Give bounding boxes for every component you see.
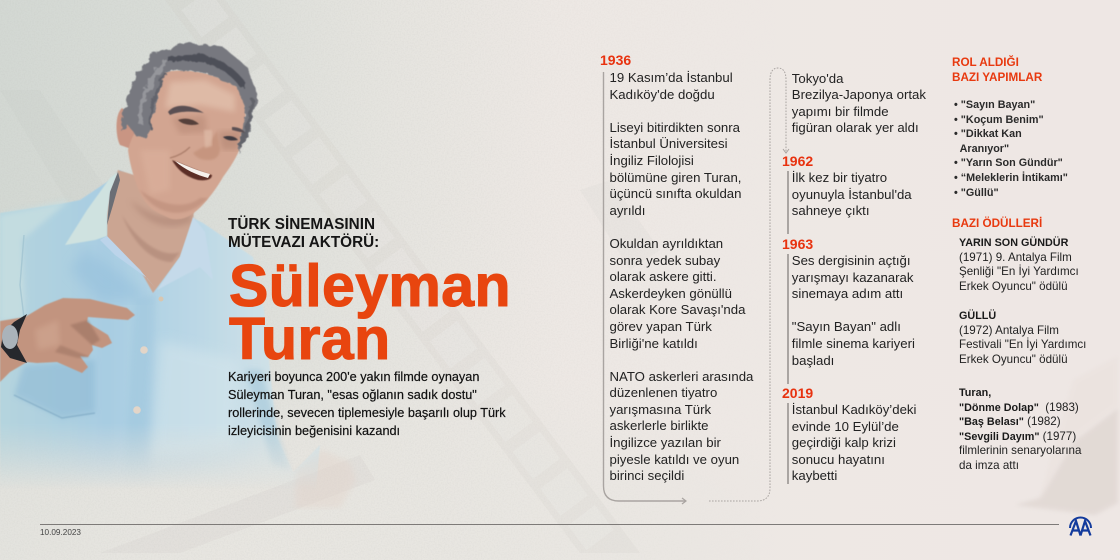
heading: subtitle xyxy=(228,215,379,251)
timeline text 1936: Birliği'ne katıldı xyxy=(610,336,698,350)
screenwriting note: "Dönme Dolap" (1983) xyxy=(959,401,1079,414)
timeline text 1963: yarışmayı kazanarak xyxy=(792,270,913,285)
screenwriting note: filmlerinin senaryolarına xyxy=(959,444,1081,457)
timeline text 1936: Okuldan ayrıldıktan xyxy=(610,236,723,251)
timeline text 1936: görev yapan Türk xyxy=(610,319,712,334)
eyes, brows and nose xyxy=(168,106,204,115)
timeline text 2019: kaybetti xyxy=(792,468,837,483)
continued text 1936: figüran olarak yer aldı xyxy=(792,120,919,135)
shirt folds and placket xyxy=(134,300,152,434)
screenwriting note xyxy=(959,387,1082,472)
timeline text 1936: 19 Kasım’da İstanbul xyxy=(610,70,733,85)
timeline text 1962: sahneye çıktı xyxy=(792,203,870,218)
intro text xyxy=(228,370,506,438)
timeline text 1963: başladı xyxy=(792,353,834,368)
list of films xyxy=(954,99,1068,199)
heading: subtitle: MÜTEVAZI AKTÖRÜ: xyxy=(228,234,379,251)
shirt buttons xyxy=(140,346,148,354)
face xyxy=(128,71,246,219)
timeline text 2019 xyxy=(792,402,916,483)
timeline text 1962: oyunuyla İstanbul'da xyxy=(792,187,912,202)
timeline text 1936: düzenlenen tiyatro xyxy=(610,385,717,400)
forehead highlight xyxy=(165,80,235,112)
list of films: • "Dikkat Kan xyxy=(954,128,1022,140)
award: Yarın Son Gündür: YARIN SON GÜNDÜR xyxy=(959,237,1068,249)
heading: name: Süleyman xyxy=(229,253,511,319)
timeline column 2 xyxy=(782,70,926,484)
screenwriting note: Turan, xyxy=(959,387,991,399)
timeline text 1936: İngiliz Filolojisi xyxy=(610,153,694,168)
continued text 1936: Tokyo'da xyxy=(792,70,843,86)
timeline text 2019: evinde 10 Eylül’de xyxy=(792,419,899,434)
timeline text 1936: piyesle katıldı ve oyun xyxy=(610,452,739,467)
shirt xyxy=(0,170,320,500)
timeline text 1963 xyxy=(792,253,915,368)
intro text: rollerinde, sevecen tiplemesiyle başarılı olup Türk xyxy=(228,406,506,420)
timeline text 2019: geçirdiği kalp krizi xyxy=(792,435,896,450)
heading: roles: BAZI YAPIMLAR xyxy=(952,70,1042,84)
timeline text 1936 xyxy=(610,70,754,483)
timeline text 1962 xyxy=(792,170,912,218)
timeline text 1963: Ses dergisinin açtığı xyxy=(792,253,911,268)
continued text 1936 xyxy=(792,70,926,135)
portrait photo of Süleyman Turan xyxy=(0,42,346,505)
timeline rule 1963 xyxy=(787,254,788,384)
list of films: • "Güllü" xyxy=(954,187,999,199)
ear xyxy=(116,108,136,150)
award: Yarın Son Gündür: Şenliği "En İyi Yardımcı xyxy=(959,265,1079,278)
timeline text 1936: sonra yedek subay xyxy=(610,253,720,268)
timeline text 1963: filmle sinema kariyeri xyxy=(792,336,915,351)
timeline text 2019: İstanbul Kadıköy’deki xyxy=(792,402,916,417)
timeline text 1936: olarak askere gitti. xyxy=(610,269,717,284)
smile xyxy=(172,160,212,180)
collar xyxy=(65,172,118,245)
icon: AA logo xyxy=(1069,516,1092,536)
timeline text 1936: birinci seçildi xyxy=(610,468,684,483)
timeline text 1936: ayrıldı xyxy=(610,203,645,218)
timeline text 1936: askerlerle birlikte xyxy=(610,418,708,433)
list of films: • "Yarın Son Gündür" xyxy=(954,157,1063,169)
right body highlight xyxy=(150,342,231,454)
heading: awards: BAZI ÖDÜLLERİ xyxy=(952,216,1042,230)
heading: roles: ROL ALDIĞI xyxy=(952,56,1019,68)
timeline rule 1962 xyxy=(787,171,788,234)
timeline column 1 xyxy=(600,52,754,483)
faint forearm xyxy=(295,450,356,508)
award: Güllü xyxy=(959,309,1086,366)
timeline text 1936: olarak Kore Savaşı'nda xyxy=(610,302,745,317)
year 1963: 1963 xyxy=(782,236,813,252)
heading: roles xyxy=(952,55,1042,84)
date: 10.09.2023 xyxy=(40,528,81,537)
timeline text 1936: İstanbul Üniversitesi xyxy=(610,136,728,151)
timeline text 1936: İngilizce yazılan bir xyxy=(610,435,721,450)
intro text: Kariyeri boyunca 200'e yakın filmde oynayan xyxy=(228,370,479,384)
heading: name xyxy=(229,253,511,372)
timeline text 1963: "Sayın Bayan" adlı xyxy=(792,319,901,334)
heading: name: Turan xyxy=(229,306,391,372)
timeline rule 2019 xyxy=(787,403,788,484)
timeline connector line and arrows xyxy=(602,68,790,504)
timeline text 1936: NATO askerleri arasında xyxy=(610,369,753,384)
timeline text 2019: sonucu hayatını xyxy=(792,452,885,467)
year 2019: 2019 xyxy=(782,385,813,401)
timeline text 1962: İlk kez bir tiyatro xyxy=(792,170,887,185)
screenwriting note: da imza attı xyxy=(959,459,1019,472)
award: Güllü: Erkek Oyuncu" ödülü xyxy=(959,353,1068,366)
list of films: • "Koçum Benim" xyxy=(954,114,1044,126)
intro text: izleyicisinin beğenisini kazandı xyxy=(228,424,400,438)
award: Yarın Son Gündür xyxy=(959,236,1079,293)
timeline text 1936: yarışmasına Türk xyxy=(610,402,711,417)
year 1962: 1962 xyxy=(782,152,813,168)
continued text 1936: yapımı bir filmde xyxy=(792,104,889,119)
timeline text 1963: sinemaya adım attı xyxy=(792,286,903,301)
screenwriting note: "Baş Belası" (1982) xyxy=(959,415,1061,428)
continued text 1936: Brezilya-Japonya ortak xyxy=(792,87,926,102)
award: Güllü: Festivali "En İyi Yardımcı xyxy=(959,338,1086,351)
award: Güllü: (1972) Antalya Film xyxy=(959,324,1059,337)
eye socket shading xyxy=(172,115,207,134)
award: Yarın Son Gündür: Erkek Oyuncu" ödülü xyxy=(959,280,1068,293)
chin shadow xyxy=(140,190,208,213)
list of films: Aranıyor" xyxy=(960,143,1009,155)
screenwriting note: "Sevgili Dayım" (1977) xyxy=(959,430,1076,443)
left sleeve highlight xyxy=(1,204,64,320)
list of films: • “Meleklerin İntikamı" xyxy=(954,172,1068,184)
timeline text 1936: Liseyi bitirdikten sonra xyxy=(610,120,740,135)
hair xyxy=(120,43,258,153)
timeline text 1936: Askerdeyken gönüllü xyxy=(610,286,732,301)
hand and forearm xyxy=(0,298,135,382)
timeline text 1936: Kadıköy'de doğdu xyxy=(610,87,715,102)
timeline text 1936: üçüncü sınıfta okuldan xyxy=(610,186,741,201)
wristwatch xyxy=(1,314,27,363)
footer line xyxy=(40,524,1059,525)
neck xyxy=(107,170,195,293)
list of films: • "Sayın Bayan" xyxy=(954,99,1035,111)
year 1936: 1936 xyxy=(600,52,631,68)
heading: subtitle: TÜRK SİNEMASININ xyxy=(228,216,375,233)
award: Güllü: GÜLLÜ xyxy=(959,310,996,322)
pocket xyxy=(14,360,95,418)
timeline text 1936: bölümüne giren Turan, xyxy=(610,170,741,185)
intro text: Süleyman Turan, "esas oğlanın sadık dostu" xyxy=(228,388,477,402)
award: Yarın Son Gündür: (1971) 9. Antalya Film xyxy=(959,251,1072,264)
